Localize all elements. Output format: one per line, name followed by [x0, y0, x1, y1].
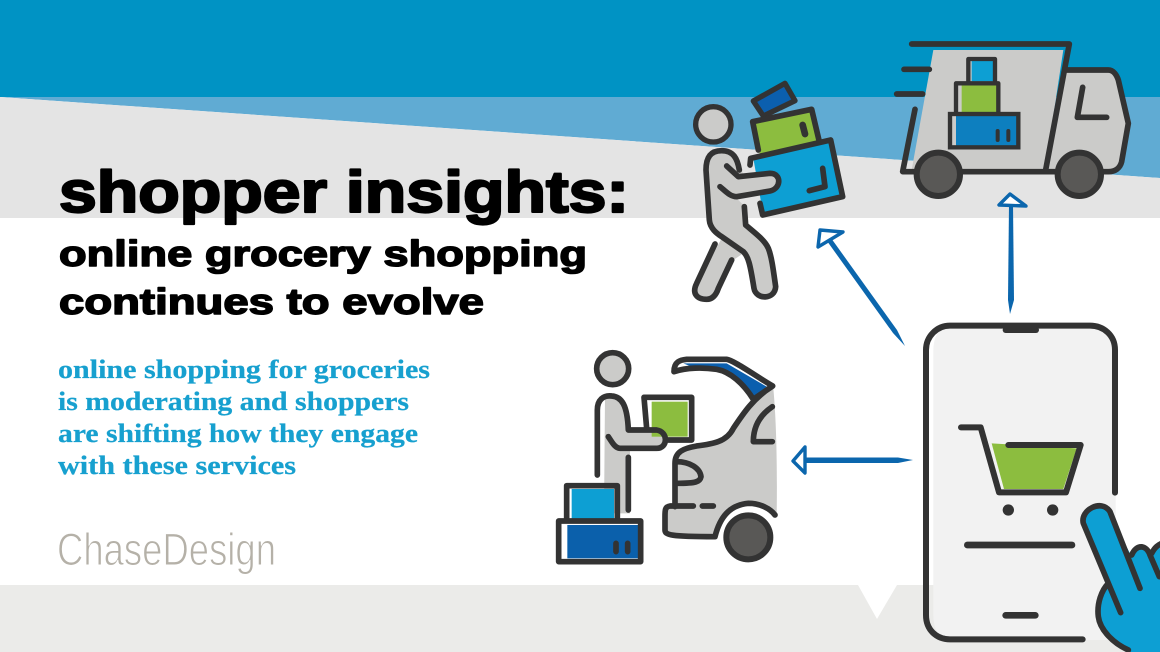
- cart wheel right: [1047, 504, 1058, 516]
- person body fill: [695, 152, 779, 299]
- phone text line: [967, 535, 1072, 555]
- truck window: [1077, 87, 1107, 117]
- arrow: phone to truck: [999, 194, 1026, 314]
- arrow: phone to van: [793, 447, 913, 473]
- top box: [753, 83, 795, 116]
- background: top blue band: [0, 0, 1160, 97]
- background: light blue wedge: [0, 97, 1160, 178]
- cart outline: [961, 427, 1081, 492]
- subtitle line 2: continues to evolve: [59, 281, 484, 322]
- arrow: phone to person: [818, 230, 905, 346]
- truck box body: [912, 50, 1063, 170]
- icon: delivery truck: [897, 44, 1128, 196]
- truck rear wheel: [917, 153, 960, 196]
- subtitle: [59, 233, 587, 322]
- van wheel: [726, 515, 770, 559]
- van outline: [665, 359, 775, 537]
- phone home bar: [1006, 605, 1035, 625]
- icon: smartphone with shopping cart: [926, 326, 1160, 652]
- background: grey wedge: [0, 97, 1160, 218]
- small light blue box: [567, 486, 617, 519]
- truck outline: [903, 44, 1128, 172]
- middle box: [753, 109, 819, 155]
- phone screen: [933, 326, 1116, 640]
- truck front wheel: [1058, 153, 1101, 196]
- person outline: [597, 396, 665, 510]
- truck cab: [1047, 70, 1128, 172]
- description text: are shifting how they engage: [58, 419, 418, 448]
- truck middle box: [956, 83, 998, 113]
- person body fill: [604, 398, 665, 513]
- person arm: [720, 166, 779, 197]
- description text: with these services: [58, 451, 296, 480]
- icon: curbside van pickup: [559, 353, 777, 562]
- subtitle line 1: online grocery shopping: [59, 233, 587, 274]
- person arm outline: [720, 166, 779, 197]
- cart basket fill: [992, 443, 1077, 489]
- van body fill: [664, 388, 777, 537]
- cart wheel left: [1003, 504, 1014, 516]
- background: bottom grey band with pointer notch: [0, 585, 1160, 652]
- phone notch: [1006, 321, 1036, 339]
- person back leg outline: [695, 244, 732, 299]
- description text: [58, 355, 430, 480]
- truck speed lines: [897, 69, 929, 94]
- description text: is moderating and shoppers: [58, 387, 409, 416]
- hand outline: [1083, 506, 1160, 650]
- phone outline: [926, 326, 1115, 639]
- person torso and leg outline: [706, 151, 776, 297]
- green box: [644, 397, 692, 440]
- icon: person carrying boxes: [695, 83, 843, 299]
- large box: [750, 140, 843, 215]
- person head: [696, 107, 731, 142]
- van open tailgate fill: [683, 363, 767, 399]
- person head: [597, 353, 629, 385]
- truck top box: [968, 59, 995, 81]
- logo: ChaseDesign: ChaseDesign: [57, 524, 276, 575]
- description text: online shopping for groceries: [58, 355, 430, 384]
- large dark blue box: [559, 521, 641, 562]
- hand fill: [1083, 507, 1160, 652]
- truck bottom box: [950, 114, 1018, 147]
- title: shopper insights:: [59, 160, 629, 225]
